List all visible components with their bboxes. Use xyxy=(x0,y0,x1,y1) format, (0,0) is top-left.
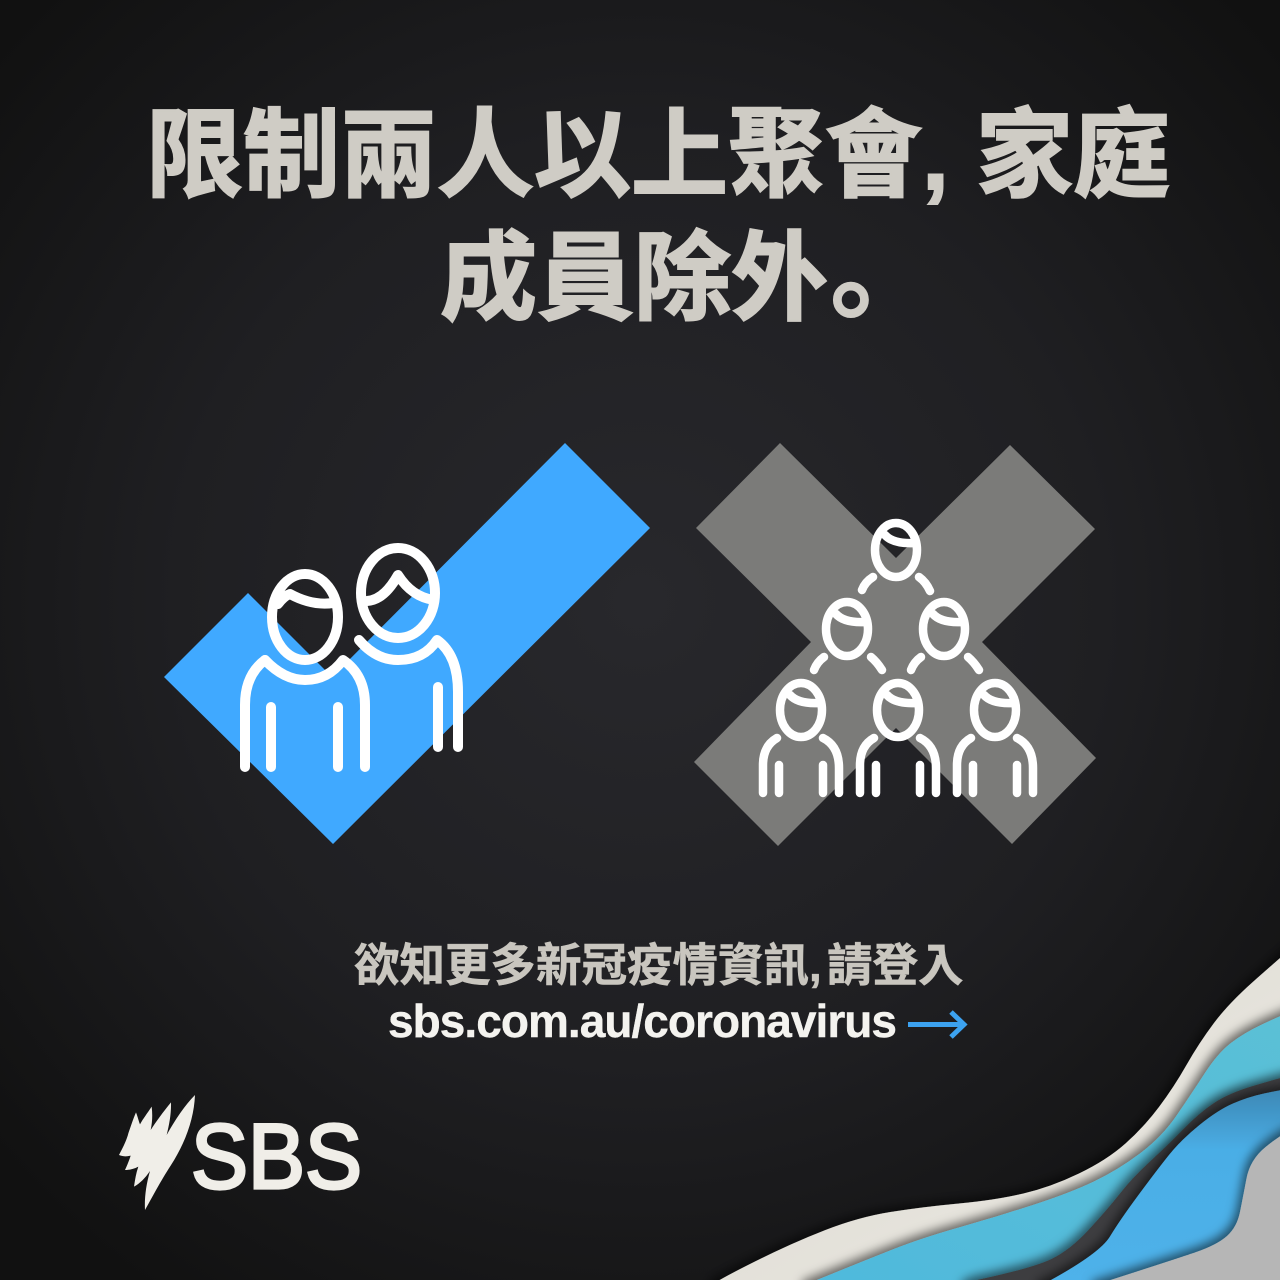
back person xyxy=(359,548,458,747)
person bottom left xyxy=(763,683,839,793)
icon: crowd pyramid xyxy=(763,523,1033,793)
icon: two people xyxy=(245,548,458,767)
text: more information: 欲知更多新冠疫情資訊, xyxy=(354,940,822,991)
person row two right xyxy=(911,602,979,670)
cross mark xyxy=(694,443,1096,846)
person bottom middle xyxy=(860,683,936,793)
SBS logo xyxy=(119,1095,362,1210)
text: url: sbs.com.au/coronavirus xyxy=(388,995,897,1047)
title xyxy=(146,101,1170,341)
icon: SBS sparkles xyxy=(119,1095,195,1210)
text: more information: 請登入 xyxy=(827,940,964,991)
arrow xyxy=(908,1012,964,1037)
wave: cream layer xyxy=(712,945,1280,1280)
wave: blue layer xyxy=(1040,1088,1280,1280)
person row two left xyxy=(814,602,882,670)
person bottom right xyxy=(957,683,1033,793)
decorative paper waves xyxy=(712,945,1280,1280)
wave: teal layer xyxy=(805,1010,1280,1280)
wave: dark layer xyxy=(965,1074,1280,1280)
front person xyxy=(245,574,365,767)
title: 。 xyxy=(830,185,938,341)
call to action text xyxy=(354,940,964,1047)
title: 限制兩人以上聚會, xyxy=(146,101,949,210)
logo wordmark: SBS xyxy=(191,1106,362,1208)
person top xyxy=(862,523,930,591)
wave: grey layer xyxy=(1095,1128,1280,1280)
icon: blue check mark with two people xyxy=(164,443,650,844)
title: 成員除外 xyxy=(440,224,828,333)
title: 家庭 xyxy=(976,101,1170,210)
icon: grey cross with group of six people xyxy=(694,443,1096,846)
check mark xyxy=(164,443,650,844)
